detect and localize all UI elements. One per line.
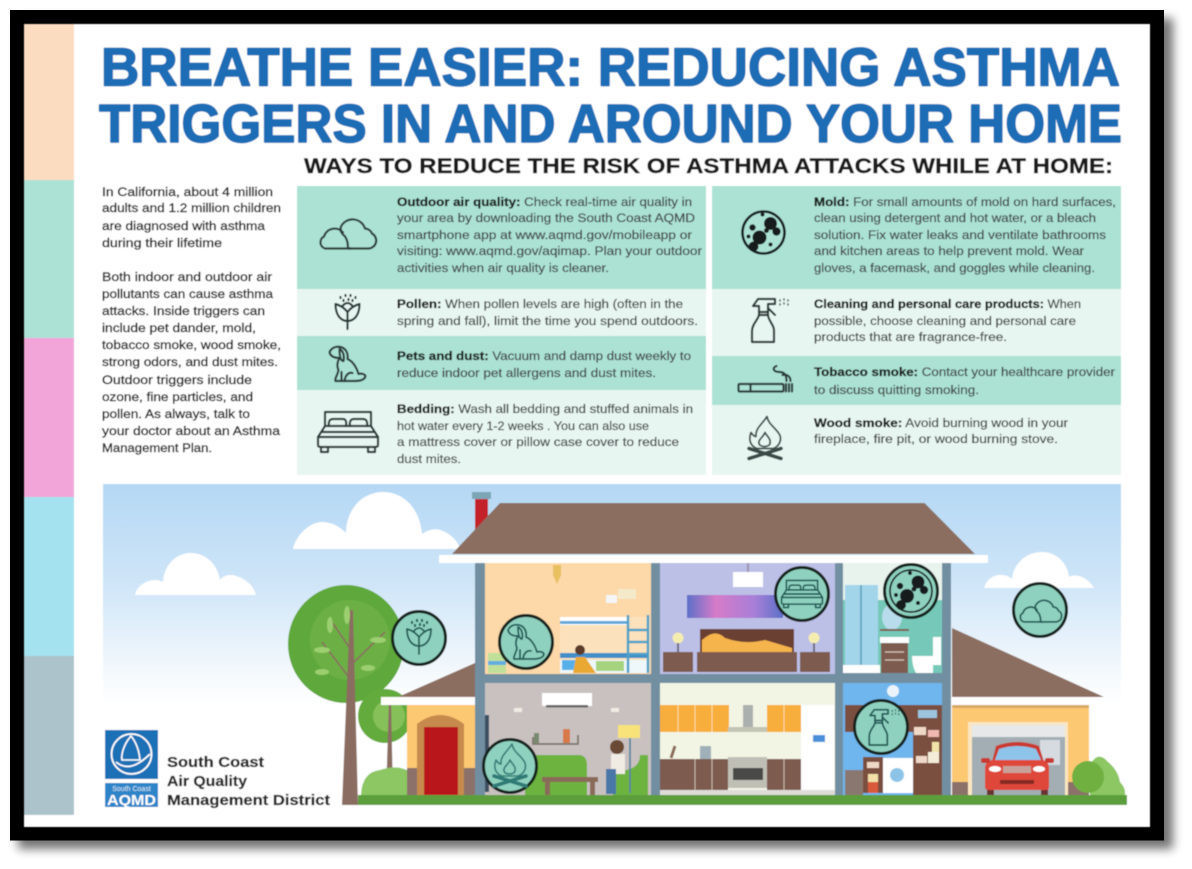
logo wordmark: Air Quality	[167, 774, 247, 790]
garden bush	[1072, 757, 1125, 795]
text: mold	[814, 195, 1116, 275]
room: laundry	[843, 683, 942, 795]
text: mold: Mold: For small amounts of mold on hard surfaces,	[814, 195, 1116, 209]
logo mark: AQMD	[107, 792, 156, 809]
intro text block: tobacco smoke, wood smoke,	[102, 338, 281, 352]
text: tobacco smoke: to discuss quitting smoking.	[814, 383, 979, 397]
icon: campfire	[749, 416, 781, 458]
text: bedding: a mattress cover or pillow case cover to reduce	[397, 435, 679, 449]
intro text block: Both indoor and outdoor air	[102, 270, 272, 284]
marker: wood smoke	[484, 740, 536, 792]
logo: South Coast AQMD	[105, 730, 330, 809]
chimney	[472, 492, 491, 537]
room: master bedroom	[660, 563, 835, 674]
icon: spray bottle	[752, 299, 788, 342]
title	[99, 38, 1122, 154]
ground	[358, 795, 1127, 805]
big tree	[288, 585, 404, 805]
icon: cloud	[320, 219, 376, 248]
icon: cigarette	[738, 366, 792, 392]
roof	[452, 503, 975, 554]
title: BREATHE EASIER: REDUCING ASTHMA	[101, 38, 1120, 98]
logo mark: South Coast	[112, 786, 151, 793]
intro text block: attacks. Inside triggers can	[102, 304, 265, 318]
text: outdoor air quality: Outdoor air quality: Check real-time air quality in	[397, 195, 692, 209]
text: pollen	[397, 297, 698, 328]
panel: tobacco smoke	[712, 356, 1121, 405]
text: outdoor air quality: activities when air quality is cleaner.	[397, 261, 609, 275]
panel: mold	[712, 186, 1121, 289]
rooms shell	[475, 563, 951, 795]
text: mold: gloves, a facemask, and goggles while cleaning.	[814, 261, 1095, 275]
marker: bedding	[776, 568, 828, 620]
text: pets and dust: reduce indoor pet allergens and dust mites.	[397, 366, 656, 380]
intro text block: pollen. As always, talk to	[102, 407, 250, 421]
intro text block: strong odors, and dust mites.	[102, 355, 278, 369]
intro text block: Management Plan.	[102, 441, 212, 455]
small tree	[358, 689, 412, 795]
text: tobacco smoke	[814, 365, 1115, 397]
marker: mold	[884, 564, 938, 618]
marker: cleaning products	[854, 700, 908, 754]
icon: mold	[742, 212, 784, 254]
text: bedding: Bedding: Wash all bedding and stuffed animals in	[397, 402, 693, 416]
text: mold: and kitchen areas to help prevent mold. Wear	[814, 244, 1084, 258]
intro text block: pollutants can cause asthma	[102, 287, 273, 301]
intro text block: your doctor about an Asthma	[102, 424, 280, 438]
panel: cleaning and personal care products	[712, 289, 1121, 356]
icon: bed	[318, 412, 378, 452]
car	[981, 742, 1054, 795]
marker: outdoor air	[1014, 584, 1066, 636]
logo mark	[105, 730, 158, 809]
text: bedding	[397, 402, 693, 466]
text: outdoor air quality: your area by downloading the South Coast AQMD	[397, 211, 695, 225]
icon: dog	[330, 347, 366, 381]
panel: pets and dust	[297, 336, 706, 390]
text: pollen: Pollen: When pollen levels are high (often in the	[397, 297, 683, 311]
text: tobacco smoke: Tobacco smoke: Contact your healthcare provider	[814, 365, 1115, 379]
text: mold: clean using detergent and hot water, or a bleach	[814, 211, 1096, 225]
right annex with garage	[952, 628, 1125, 795]
panel: outdoor air quality	[297, 186, 706, 289]
text: cleaning products: products that are fragrance-free.	[814, 330, 1007, 344]
panel: wood smoke	[712, 405, 1121, 475]
text: outdoor air quality: visiting: www.aqmd.gov/aqimap. Plan your outdoor	[397, 244, 702, 258]
subheading: WAYS TO REDUCE THE RISK OF ASTHMA ATTACKS WHILE AT HOME:	[304, 154, 1113, 178]
logo wordmark: Management District	[167, 793, 330, 809]
marker: pollen	[392, 612, 446, 664]
text: pets and dust: Pets and dust: Vacuum and damp dust weekly to	[397, 349, 691, 363]
text: wood smoke: fireplace, fire pit, or wood burning stove.	[814, 432, 1058, 446]
text: outdoor air quality	[397, 195, 702, 275]
room: kitchen	[660, 683, 835, 795]
eave	[439, 555, 988, 563]
text: mold: solution. Fix water leaks and ventilate bathrooms	[814, 228, 1106, 242]
text: wood smoke: Wood smoke: Avoid burning wood in your	[814, 416, 1068, 430]
text: cleaning products: Cleaning and personal care products: When	[814, 297, 1081, 311]
left colour strip	[24, 24, 74, 815]
left annex	[381, 663, 475, 795]
room: bathroom	[843, 563, 942, 673]
intro text block: adults and 1.2 million children	[102, 201, 281, 215]
text: pets and dust	[397, 349, 691, 380]
text: bedding: hot water every 1-2 weeks . You can also use	[397, 419, 649, 433]
intro text block: include pet dander, mold,	[102, 321, 256, 335]
text: cleaning products	[814, 297, 1081, 344]
intro text block: are diagnosed with asthma	[102, 219, 265, 233]
intro text block: In California, about 4 million	[102, 185, 273, 199]
panel: bedding	[297, 390, 706, 475]
panel: pollen	[297, 289, 706, 336]
sky	[103, 484, 1121, 706]
text: cleaning products: possible, choose cleaning and personal care	[814, 314, 1076, 328]
intro text block: ozone, fine particles, and	[102, 390, 253, 404]
icon: flower	[336, 295, 360, 329]
text: bedding: dust mites.	[397, 452, 461, 466]
marker: pets	[500, 616, 552, 668]
title: TRIGGERS IN AND AROUND YOUR HOME	[99, 94, 1122, 154]
text: pollen: spring and fall), limit the time you spend outdoors.	[397, 314, 698, 328]
intro text block: Outdoor triggers include	[102, 373, 252, 387]
intro text block	[102, 185, 281, 455]
room: living room	[485, 683, 651, 795]
illustration: house scene	[103, 484, 1127, 805]
room: kids bedroom	[485, 563, 651, 674]
text: outdoor air quality: smartphone app at www.aqmd.gov/mobileapp or	[397, 228, 692, 242]
text: wood smoke	[814, 416, 1068, 446]
intro text block: during their lifetime	[102, 236, 222, 250]
logo wordmark: South Coast	[167, 755, 264, 771]
clouds	[135, 492, 1094, 595]
logo wordmark	[167, 755, 330, 809]
